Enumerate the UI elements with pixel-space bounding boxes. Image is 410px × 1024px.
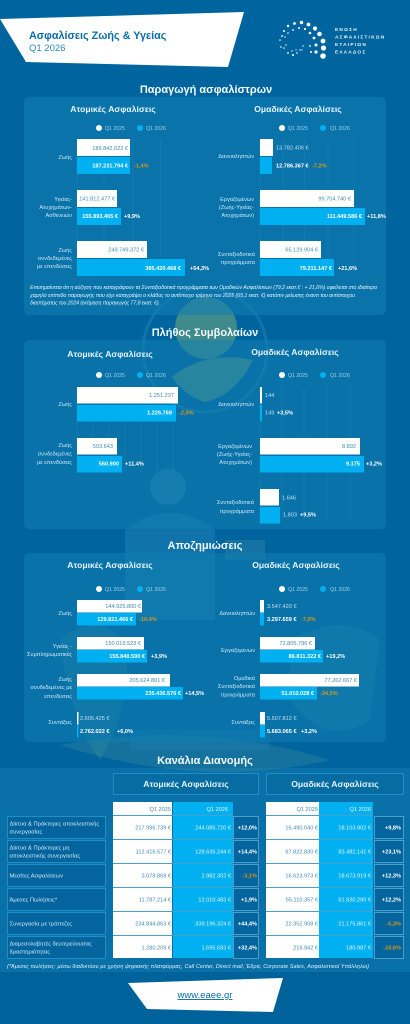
bars: Υγείας: 155.893.405 € bbox=[82, 214, 119, 220]
legend bbox=[96, 372, 166, 379]
row: Άμεσες Πωλήσεις: 12.010.483 € bbox=[198, 898, 232, 904]
legend: Q1 2026 bbox=[146, 587, 166, 593]
bars: Συνταξιοδοτικά: 1.803 bbox=[283, 512, 297, 518]
row: Συνεργασία με τράπεζες bbox=[8, 912, 404, 934]
row: Άμεσες Πωλήσεις: +12,2% bbox=[382, 898, 401, 904]
bars: Εργαζομένων bbox=[221, 637, 345, 662]
row: Δίκτυα μη αποκλειστικής bbox=[8, 840, 404, 862]
column headers: Q1 2026 bbox=[207, 807, 228, 813]
row: Δίκτυα μη αποκλειστικής: 128.635.244 € bbox=[195, 850, 232, 856]
row: Συνεργασία με τράπεζες: -5,3% bbox=[386, 922, 401, 928]
logo text: ΕΤΑΙΡΙΩΝ bbox=[335, 42, 367, 48]
bars: Εργαζομένων: +19,2% bbox=[326, 654, 345, 660]
section: Παραγωγή ασφαλίστρων bbox=[29, 84, 386, 306]
bars: Δανειοληπτών bbox=[218, 139, 327, 174]
heading: Κανάλια Διανομής bbox=[157, 755, 253, 767]
bars: Συνταξιοδοτικά: 51.010.028 € bbox=[281, 691, 315, 697]
bars: Συνταξιοδοτικά: Συνταξιοδοτικά bbox=[218, 683, 256, 690]
bars: Ζωής: 189.842.622 € bbox=[92, 146, 129, 152]
footer banner bbox=[128, 978, 283, 1012]
bars: Συντάξεις bbox=[48, 712, 133, 738]
gridlines bbox=[260, 139, 354, 276]
row: Δίκτυα αποκλειστικής: 217.996.739 € bbox=[135, 826, 172, 832]
bars: Ζωής συνδεδεμένες: Ζωής bbox=[58, 442, 72, 449]
bars: Ζωής: Ζωής bbox=[58, 610, 72, 617]
row: Δίκτυα αποκλειστικής bbox=[8, 816, 404, 838]
legend: Q1 2025 bbox=[105, 587, 125, 593]
bars: Συντάξεις: 5.507.812 € bbox=[267, 716, 297, 722]
column headers: Q1 2026 bbox=[350, 807, 371, 813]
bars: Συνταξιοδοτικά bbox=[218, 241, 357, 276]
row: Διαμεσολαβητές: 180.987 € bbox=[346, 946, 372, 952]
bars: Ζωής συνδεδεμένες bbox=[37, 241, 209, 276]
tab: Ομαδικές: Ομαδικές Ασφαλίσεις bbox=[291, 779, 379, 789]
bars: Ζωής: -2,0% bbox=[179, 410, 194, 416]
row: Δίκτυα μη αποκλειστικής: +23,1% bbox=[382, 850, 401, 856]
footnote: (*Άμεσες πωλήσεις: μέσω διαδικτύου με χρήση ψηφιακής πλατφόρμας, Call Center, Direct mail, Έδρα, Corporate Sales, Ασφαλιστικοί Υπάλληλοι) bbox=[7, 963, 369, 970]
bars: Συνταξιοδοτικά: προγράμματα bbox=[221, 259, 256, 266]
row: Δίκτυα μη αποκλειστικής: Δίκτυα & Πράκτορες μη bbox=[10, 844, 69, 852]
bars: Υγείας: +3,9% bbox=[151, 654, 167, 660]
bars: Δανειοληπτών: 13.782.406 € bbox=[276, 146, 310, 152]
bars: Συντάξεις: 2.605.425 € bbox=[80, 716, 110, 722]
bars: Συνταξιοδοτικά: -34,0% bbox=[320, 691, 338, 697]
logo text: ΕΝΩΣΗ bbox=[335, 27, 358, 33]
bars: Συνταξιοδοτικά: Συνταξιοδοτικά bbox=[217, 499, 255, 506]
bars: Ζωής συνδεδεμένες: +54,3% bbox=[190, 266, 209, 272]
legend bbox=[96, 586, 166, 593]
column headers: Q1 2025 bbox=[297, 807, 318, 813]
row: Διαμεσολαβητές: 1.280.209 € bbox=[141, 946, 172, 952]
bars: Εργαζομένων: Ατυχημάτων) bbox=[219, 459, 252, 466]
bars: Ζωής συνδεδεμένες: +14,5% bbox=[185, 691, 204, 697]
panel: Ομαδικές bbox=[218, 104, 386, 276]
note: Επισημαίνεται ότι η αύξηση που καταγράφουν τα Συνταξιοδοτικά προγράμματα των Ομαδικών Ασφαλίσεων (79,2 εκατ.€ : + 21,6%) οφείλεται στο ιδιαίτερα bbox=[30, 284, 378, 291]
bars: Ζωής: Ζωής bbox=[58, 401, 72, 408]
bars: Εργαζομένων bbox=[217, 438, 382, 472]
bars: Υγείας bbox=[27, 637, 167, 662]
subheading: Ομαδικές Ασφαλίσεις bbox=[254, 104, 342, 114]
row: Μεσίτες: 2.982.302 € bbox=[201, 874, 232, 880]
bars: Εργαζομένων: (Ζωής-Υγείας- bbox=[217, 451, 252, 458]
panel: Παραγωγή background bbox=[24, 97, 386, 315]
panel: Ατομικές bbox=[27, 560, 204, 738]
bars: Υγείας: 155.840.590 € bbox=[109, 654, 146, 660]
subtitle: Q1 2026 bbox=[29, 43, 65, 54]
row: Άμεσες Πωλήσεις bbox=[8, 888, 404, 910]
website link: www.eaee.gr bbox=[177, 990, 232, 1001]
bars: Συνταξιοδοτικά: προγράμματα bbox=[221, 692, 256, 698]
row: Μεσίτες bbox=[8, 864, 404, 886]
bars: Εργαζομένων: Ατυχημάτων) bbox=[221, 212, 254, 219]
tab: Ατομικές: Ατομικές Ασφαλίσεις bbox=[143, 779, 229, 789]
bars: Δανειοληπτών: 149 bbox=[265, 410, 274, 416]
title: Ασφαλίσεις Ζωής & Υγείας bbox=[29, 30, 167, 42]
bars: Υγείας: 141.812.477 € bbox=[79, 196, 116, 202]
row: Δίκτυα μη αποκλειστικής: αποκλειστικής συνεργασίας bbox=[10, 852, 80, 860]
bars: Ζωής συνδεδεμένες: με επενδύσεις bbox=[37, 264, 72, 270]
logo text: ΕΛΛΑΔΟΣ bbox=[335, 50, 366, 56]
bars: Ζωής συνδεδεμένες: 385.420.468 € bbox=[145, 266, 182, 272]
bars: Ζωής συνδεδεμένες: 560.900 bbox=[99, 462, 119, 468]
panel: Ομαδικές bbox=[217, 347, 382, 524]
note: χαμηλό επίπεδο παραγωγής που είχε καταγράψει ο κλάδος το αντίστοιχο τρίμηνο του 2025 (65,1 εκατ. €) κατόπιν μείωσης έναντι του αντίστοιχου bbox=[29, 292, 355, 299]
legend: Q1 2025 bbox=[288, 126, 308, 132]
bars: Δανειοληπτών: 3.547.420 € bbox=[267, 604, 297, 610]
panel: Ατομικές bbox=[37, 349, 194, 472]
bars: Ζωής: 187.231.794 € bbox=[92, 164, 129, 170]
legend bbox=[279, 372, 350, 379]
row: Άμεσες Πωλήσεις: 11.787.214 € bbox=[139, 898, 172, 904]
row: Άμεσες Πωλήσεις: 55.110.357 € bbox=[286, 898, 319, 904]
row: Συνεργασία με τράπεζες: Συνεργασία με τράπεζες bbox=[10, 920, 72, 928]
background illustration bbox=[60, 288, 380, 772]
bars: Ζωής συνδεδεμένες: 205.624.801 € bbox=[129, 678, 166, 684]
note bbox=[29, 284, 378, 306]
logo text bbox=[335, 27, 385, 56]
legend: Q1 2026 bbox=[330, 373, 350, 379]
bars: Δανειοληπτών bbox=[218, 387, 293, 422]
bars: Υγείας: +9,9% bbox=[124, 214, 140, 220]
bars: Εργαζομένων: Εργαζομένων bbox=[221, 647, 255, 654]
bars: Ζωής συνδεδεμένες bbox=[37, 438, 144, 472]
bars: Συνταξιοδοτικά: 79.211.147 € bbox=[300, 266, 333, 272]
row: Άμεσες Πωλήσεις: Άμεσες Πωλήσεις* bbox=[10, 896, 58, 904]
bars: Ζωής συνδεδεμένες: 235.436.576 € bbox=[145, 691, 182, 697]
bars: Συντάξεις: +3,2% bbox=[301, 729, 317, 735]
row: Συνεργασία με τράπεζες: 234.844.863 € bbox=[135, 922, 172, 928]
bars: Συντάξεις: Συντάξεις bbox=[48, 719, 72, 726]
row: Διαμεσολαβητές: 216.942 € bbox=[293, 946, 319, 952]
bars: Συντάξεις: 5.683.065 € bbox=[267, 729, 297, 735]
subheading: Ατομικές Ασφαλίσεις bbox=[67, 560, 153, 570]
gridlines bbox=[77, 139, 161, 276]
bars: Ζωής συνδεδεμένες: +11,4% bbox=[125, 462, 144, 468]
row: Συνεργασία με τράπεζες: 339.196.324 € bbox=[195, 922, 232, 928]
subheading: Ατομικές Ασφαλίσεις bbox=[67, 349, 153, 359]
column headers bbox=[150, 807, 371, 813]
bars: Εργαζομένων: 111.449.586 € bbox=[327, 214, 363, 220]
row: Άμεσες Πωλήσεις: 61.830.290 € bbox=[338, 898, 372, 904]
legend: Q1 2025 bbox=[105, 126, 125, 132]
row: Δίκτυα μη αποκλειστικής: 67.822.830 € bbox=[285, 850, 319, 856]
row: Διαμεσολαβητές: 1.695.593 € bbox=[201, 946, 232, 952]
bars: Εργαζομένων: 9.175 bbox=[346, 462, 360, 468]
bars: Εργαζομένων: Εργαζομένων bbox=[220, 196, 254, 203]
panel: Ατομικές bbox=[37, 104, 209, 276]
bars: Εργαζομένων bbox=[219, 190, 386, 225]
table columns bbox=[113, 802, 373, 958]
legend: Q1 2025 bbox=[105, 373, 125, 379]
row: Μεσίτες: Μεσίτες Ασφαλίσεων bbox=[10, 874, 63, 880]
bars: Ζωής συνδεδεμένες: Ζωής bbox=[58, 676, 72, 683]
bars: Συνταξιοδοτικά: 1.646 bbox=[282, 496, 296, 502]
icon: logo dots bbox=[279, 21, 326, 59]
bars: Υγείας: Ατυχημάτων- bbox=[39, 204, 72, 211]
row: Συνεργασία με τράπεζες: 22.352.908 € bbox=[285, 922, 319, 928]
legend: Q1 2025 bbox=[288, 587, 308, 593]
bars: Συνταξιοδοτικά: +21,6% bbox=[338, 266, 357, 272]
bars: Συνταξιοδοτικά: προγράμματα bbox=[220, 508, 255, 515]
row: Δίκτυα μη αποκλειστικής: 112.416.577 € bbox=[136, 850, 172, 856]
heading: Αποζημιώσεις bbox=[168, 540, 243, 552]
bars: Ζωής συνδεδεμένες: με επενδύσεις bbox=[37, 460, 72, 466]
bars: Εργαζομένων: +3,2% bbox=[366, 462, 382, 468]
legend bbox=[96, 125, 166, 132]
row: Δίκτυα μη αποκλειστικής: 83.482.141 € bbox=[338, 850, 372, 856]
subheading: Ομαδικές Ασφαλίσεις bbox=[252, 560, 340, 570]
section: Πλήθος Συμβολαίων bbox=[37, 327, 382, 524]
bars: Ζωής bbox=[58, 600, 157, 626]
bars: Δανειοληπτών: 3.297.659 € bbox=[267, 617, 297, 623]
subheading: Ομαδικές Ασφαλίσεις bbox=[251, 347, 339, 357]
bars: Εργαζομένων: 86.811.322 € bbox=[289, 654, 322, 660]
bars: Συνταξιοδοτικά: +9,5% bbox=[300, 512, 316, 518]
bars: Ζωής συνδεδεμένες: 249.749.372 € bbox=[108, 248, 145, 254]
row: Δίκτυα αποκλειστικής: 244.085.720 € bbox=[195, 826, 232, 832]
row: Δίκτυα αποκλειστικής: συνεργασίας bbox=[10, 830, 42, 836]
section: Αποζημιώσεις bbox=[27, 540, 359, 738]
tab: Ατομικές bbox=[114, 774, 258, 794]
bars: Υγείας: Υγείας - bbox=[53, 644, 72, 650]
row: Άμεσες Πωλήσεις: +1,9% bbox=[241, 898, 257, 904]
bars: Συνταξιοδοτικά: Ομαδικά bbox=[234, 675, 256, 682]
bars: Ζωής: -1,4% bbox=[134, 164, 149, 170]
column headers: Q1 2025 bbox=[150, 807, 171, 813]
bars: Εργαζομένων: +11,8% bbox=[367, 214, 386, 220]
panel: Πλήθος background bbox=[24, 340, 386, 529]
tab: Ομαδικές bbox=[266, 774, 404, 794]
legend bbox=[279, 125, 350, 132]
bars: Συνταξιοδοτικά bbox=[217, 489, 316, 524]
heading: Παραγωγή ασφαλίστρων bbox=[140, 84, 272, 96]
bars: Ζωής συνδεδεμένες: επενδύσεις bbox=[44, 694, 72, 700]
table row separators bbox=[113, 815, 373, 936]
gridlines bbox=[260, 387, 350, 523]
row: Συνεργασία με τράπεζες: 21.175.861 € bbox=[338, 922, 372, 928]
row: Μεσίτες: 16.623.973 € bbox=[285, 874, 319, 880]
heading: Πλήθος Συμβολαίων bbox=[152, 327, 258, 339]
bars: Δανειοληπτών bbox=[219, 600, 316, 626]
row: Διαμεσολαβητές: Διαμεσολαβητές δευτερεύουσας bbox=[10, 940, 92, 948]
row: Δίκτυα αποκλειστικής: Δίκτυα & Πράκτορες αποκλειστικής bbox=[10, 820, 99, 828]
legend: Q1 2026 bbox=[146, 126, 166, 132]
bars: Υγείας: 150.019.523 € bbox=[105, 641, 142, 647]
bars: Ζωής συνδεδεμένες: συνδεδεμένες bbox=[38, 255, 72, 262]
bars: Ζωής: Ζωής bbox=[58, 154, 72, 161]
bars: Υγείας: Συμπληρωματικές bbox=[27, 651, 72, 658]
row: Μεσίτες: 3.078.869 € bbox=[141, 874, 172, 880]
bars: Ζωής bbox=[58, 139, 149, 174]
bars: Συντάξεις: Συντάξεις bbox=[231, 719, 255, 726]
note: διαστήματος του 2024 (εκτίμηση παραγωγής 77,8 εκατ. €). bbox=[30, 300, 160, 306]
row: Δίκτυα αποκλειστικής: +12,0% bbox=[238, 826, 257, 832]
logo text: ΑΣΦΑΛΙΣΤΙΚΩΝ bbox=[335, 34, 385, 40]
legend: Q1 2025 bbox=[288, 373, 308, 379]
row: Δίκτυα μη αποκλειστικής: +14,4% bbox=[238, 850, 257, 856]
bars: Υγείας bbox=[39, 190, 140, 225]
panel: Αποζημιώσεις background bbox=[24, 553, 386, 742]
bars: Συνταξιοδοτικά: Συνταξιοδοτικά bbox=[218, 251, 256, 258]
bars: Εργαζομένων: 72.805.796 € bbox=[279, 641, 313, 647]
bars: Ζωής συνδεδεμένες: συνδεδεμένες bbox=[38, 450, 72, 458]
bars: Υγείας: Υγείας- bbox=[54, 197, 72, 203]
row: Διαμεσολαβητές: δραστηριότητας bbox=[10, 948, 50, 956]
row: Δίκτυα αποκλειστικής: +9,8% bbox=[385, 826, 401, 832]
header banner bbox=[0, 12, 244, 67]
bars: Ζωής συνδεδεμένες bbox=[30, 674, 204, 700]
bars: Δανειοληπτών: Δανειοληπτών bbox=[218, 402, 254, 408]
bars: Δανειοληπτών: -7,2% bbox=[312, 164, 327, 170]
bars: Εργαζομένων: 99.704.740 € bbox=[318, 196, 352, 202]
bars: Ζωής: 144.925.800 € bbox=[105, 604, 142, 610]
bars: Συνταξιοδοτικά: 77.262.667 € bbox=[324, 678, 358, 684]
bars: Ζωής bbox=[58, 387, 194, 422]
bars: Εργαζομένων: (Ζωής-Υγείας- bbox=[219, 204, 254, 211]
bars: Εργαζομένων: 8.892 bbox=[342, 444, 356, 450]
bars: Ζωής συνδεδεμένες: 503.643 bbox=[93, 444, 113, 450]
bars: Ζωής: 129.821.466 € bbox=[97, 617, 134, 623]
legend: Q1 2026 bbox=[330, 587, 350, 593]
row: Μεσίτες: 18.673.919 € bbox=[338, 874, 372, 880]
logo bbox=[279, 21, 385, 59]
row: Διαμεσολαβητές: +32,4% bbox=[238, 946, 257, 952]
bars: Ζωής συνδεδεμένες: συνδεδεμένες με bbox=[30, 684, 73, 691]
legend bbox=[279, 586, 350, 593]
row: Μεσίτες: -3,1% bbox=[242, 874, 257, 880]
bars: Υγείας: Ασθενειών bbox=[46, 213, 72, 219]
bars: Εργαζομένων: Εργαζομένων bbox=[218, 443, 252, 450]
row: Διαμεσολαβητές: -16,6% bbox=[383, 946, 401, 952]
subheading: Ατομικές Ασφαλίσεις bbox=[70, 104, 156, 114]
section: Κανάλια Διανομής bbox=[7, 755, 404, 970]
row: Μεσίτες: +12,3% bbox=[382, 874, 401, 880]
panel: Ομαδικές bbox=[218, 560, 359, 738]
bars: Δανειοληπτών: +3,5% bbox=[277, 410, 293, 416]
bars: Δανειοληπτών: 144 bbox=[265, 393, 274, 399]
bars: Συνταξιοδοτικά: 65.129.904 € bbox=[285, 248, 319, 254]
row: Δίκτυα αποκλειστικής: 18.103.902 € bbox=[338, 826, 372, 832]
bars: Ζωής συνδεδεμένες: Ζωής bbox=[58, 247, 72, 254]
row: Δίκτυα αποκλειστικής: 16.490.040 € bbox=[285, 826, 319, 832]
bars: Δανειοληπτών: Δανειοληπτών bbox=[218, 154, 254, 160]
legend: Q1 2026 bbox=[146, 373, 166, 379]
gridlines bbox=[77, 387, 173, 472]
bars: Δανειοληπτών: Δανειοληπτών bbox=[219, 611, 255, 617]
bars: Ζωής: 1.226.769 bbox=[147, 410, 172, 416]
bars: Συντάξεις bbox=[231, 712, 317, 738]
legend: Q1 2026 bbox=[330, 126, 350, 132]
row: Διαμεσολαβητές bbox=[8, 936, 404, 958]
bars: Συντάξεις: 2.762.022 € bbox=[80, 729, 110, 735]
bars: Συνταξιοδοτικά bbox=[218, 674, 359, 700]
bars: Συντάξεις: +6,0% bbox=[117, 729, 133, 735]
row: Συνεργασία με τράπεζες: +44,4% bbox=[238, 922, 257, 928]
bars: Ζωής: -10,4% bbox=[139, 617, 157, 623]
bars: Ζωής: 1.251.237 bbox=[149, 393, 174, 399]
bars: Δανειοληπτών: -7,0% bbox=[301, 617, 316, 623]
bars: Δανειοληπτών: 12.786.367 € bbox=[276, 164, 310, 170]
